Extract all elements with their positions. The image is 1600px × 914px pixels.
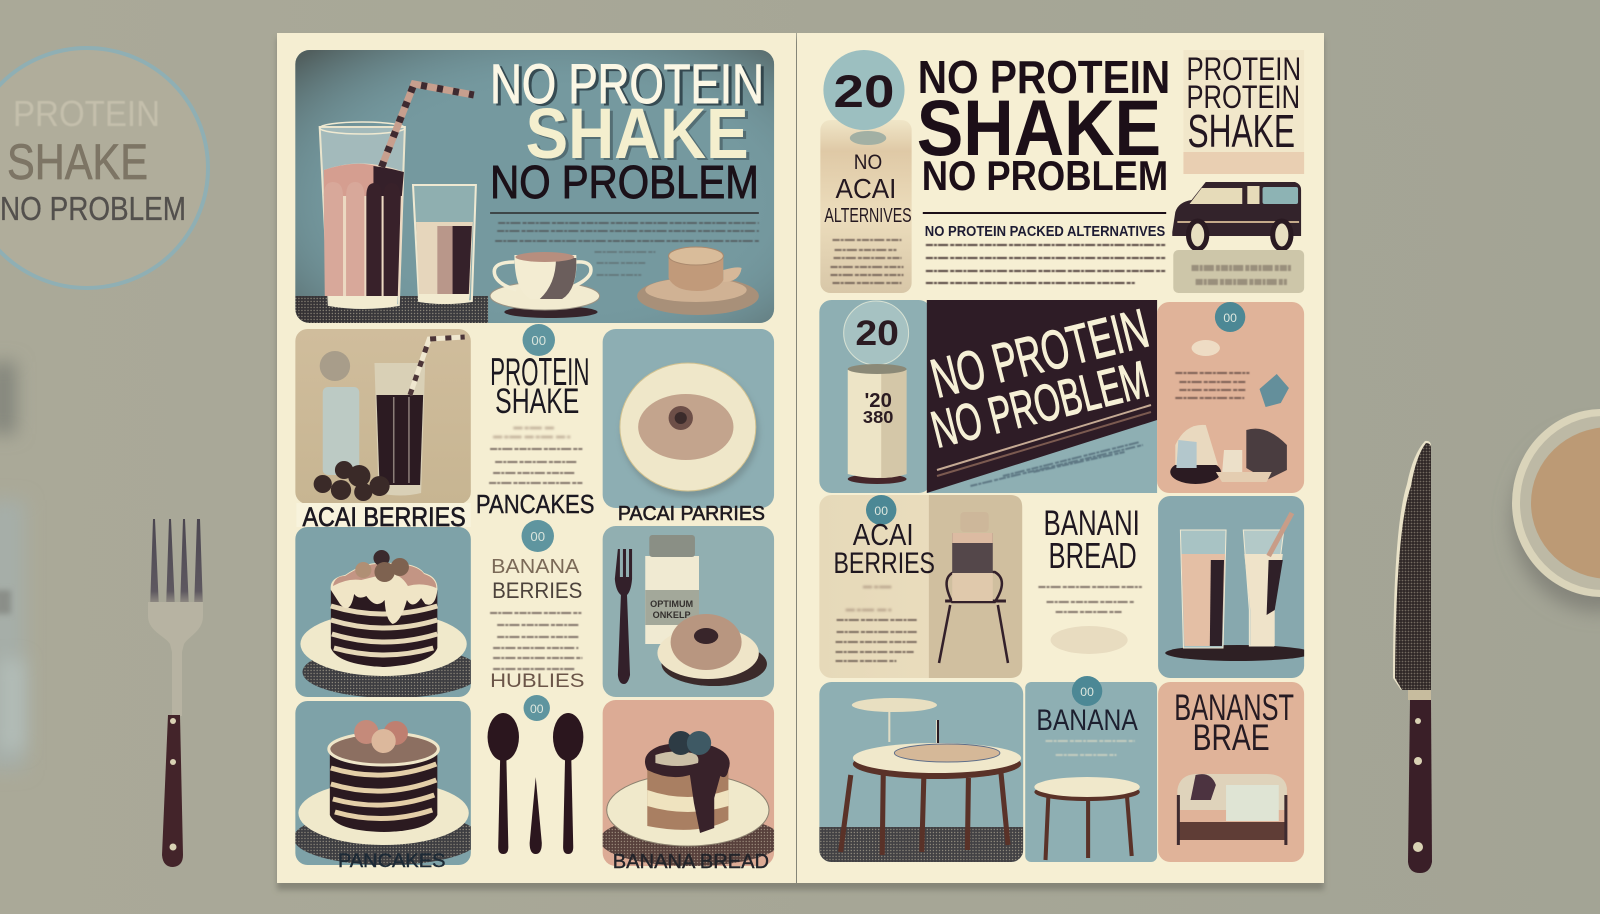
page: right	[797, 33, 1324, 883]
hero heading: NO PROTEIN	[490, 52, 764, 115]
hero text block	[490, 213, 759, 275]
banana heading: BANANA	[1036, 704, 1138, 737]
panel: protein shake column: SHAKE	[495, 382, 579, 421]
fuzzy text	[1046, 741, 1135, 755]
panel: banana table	[1025, 676, 1157, 862]
sidebar heading	[824, 151, 912, 227]
berries	[355, 550, 409, 582]
table shadow	[295, 296, 488, 323]
table	[841, 743, 1021, 855]
badge	[866, 495, 896, 525]
stack	[331, 563, 437, 667]
tall glass of shake	[320, 84, 474, 308]
page shadows	[277, 38, 1324, 890]
badge	[1215, 302, 1245, 332]
glass disc	[844, 301, 909, 365]
short glass of shake	[413, 185, 476, 304]
coaster text: protein: PROTEIN	[13, 93, 160, 134]
footer notes right	[822, 870, 1309, 872]
tan coffee cup	[637, 247, 759, 315]
badge: 00	[530, 529, 545, 544]
sidebar: no acai alternatives	[820, 50, 912, 293]
badge: 00	[531, 333, 546, 348]
panel: two glasses on teal	[1158, 496, 1311, 678]
garbled heading: BANANA	[491, 556, 580, 578]
panel: jar, fork and doughnut	[603, 526, 774, 697]
panel: banani bread column: BANANI	[1043, 504, 1140, 543]
badge: 20	[823, 50, 905, 130]
jar: ONKELP	[653, 610, 691, 620]
sidebar heading: ALTERNIVES	[824, 205, 912, 227]
small tray	[852, 698, 938, 744]
knife	[530, 777, 542, 854]
fuzzy text	[490, 613, 582, 669]
hero heading: SHAKE	[529, 96, 752, 176]
doughnut on plate	[657, 614, 767, 686]
label: pancakes: PANCAKES	[338, 851, 445, 872]
hero heading	[490, 52, 767, 208]
badge	[524, 695, 550, 721]
panel: round table	[819, 682, 1023, 862]
garbled label: HUBLIES	[490, 671, 584, 692]
side heading: protein protein shake: PROTEIN	[1186, 79, 1300, 115]
right glass	[1243, 513, 1292, 646]
sidebar text	[830, 240, 904, 283]
alternatives text block: NO PROTEIN PACKED ALTERNATIVES	[925, 223, 1165, 240]
pill	[850, 131, 886, 145]
badge: 00	[530, 702, 544, 716]
hero heading: SHAKE	[526, 94, 749, 174]
panel: cutlery silhouettes	[488, 695, 583, 854]
label: pacai parries: PACAI PARRIES	[618, 503, 765, 525]
badge: 00	[1080, 685, 1094, 699]
coaster text: no problem: NO PROBLEM	[0, 190, 186, 227]
heading: BRAE	[1193, 716, 1270, 758]
panel: protein shake column	[476, 324, 595, 519]
can: '20	[864, 390, 892, 412]
fork	[615, 549, 632, 684]
protein shake heading: PROTEIN	[490, 350, 589, 394]
sidebar heading: ACAI	[836, 172, 896, 204]
stack	[329, 733, 438, 832]
panel: hero	[295, 50, 774, 323]
label: acai berries: ACAI BERRIES	[302, 501, 466, 532]
garbled heading: BERRIES	[492, 578, 582, 603]
cup and saucer	[490, 252, 600, 318]
coaster text: shake: SHAKE	[7, 134, 148, 190]
garbled heading	[491, 556, 582, 603]
footer note left	[290, 871, 329, 873]
left edge blotches	[0, 362, 25, 770]
berries	[669, 731, 711, 755]
sketch	[1051, 626, 1128, 654]
can	[848, 364, 907, 484]
acai berries heading	[834, 517, 935, 580]
left glass	[1180, 530, 1226, 648]
sidebar heading: NO	[854, 151, 882, 174]
side heading: protein protein shake	[1183, 50, 1304, 174]
icon: knife	[1393, 441, 1432, 873]
fuzzy text	[1038, 587, 1142, 612]
banner fine print	[970, 442, 1143, 486]
left page contents	[290, 50, 782, 873]
berries	[354, 720, 408, 753]
bottle	[323, 387, 359, 475]
jar	[645, 535, 699, 644]
glass disc: 20	[855, 314, 899, 353]
panel: banani bread column	[1038, 504, 1142, 654]
side heading: protein protein shake: SHAKE	[1187, 105, 1295, 157]
banner heading: NO PROBLEM	[926, 351, 1154, 460]
label: banana bread: BANANA BREAD	[613, 851, 769, 873]
hero heading: NO PROBLEM	[490, 156, 759, 208]
chair with stacked boxes	[939, 512, 1008, 663]
acai berries heading: ACAI	[853, 517, 914, 552]
panel: canister on teal	[819, 300, 931, 493]
tall dark glass	[374, 337, 465, 496]
badge: 00	[1223, 311, 1237, 325]
panel: layered pancakes	[295, 527, 481, 698]
banner heading	[925, 297, 1154, 460]
text lines	[1175, 373, 1249, 398]
panel: pink still life	[1157, 302, 1304, 493]
right page contents	[819, 50, 1311, 871]
main heading	[917, 51, 1170, 199]
badge	[1072, 676, 1102, 706]
badge	[523, 324, 555, 356]
main heading: NO PROTEIN	[918, 51, 1170, 103]
icon: vintage van	[1172, 182, 1301, 249]
plate	[300, 612, 467, 676]
heading	[1174, 686, 1294, 758]
berries	[314, 461, 390, 501]
spoon left	[488, 713, 519, 854]
main heading: NO PROBLEM	[922, 152, 1168, 199]
badge: 20: 20	[834, 66, 894, 117]
blobs	[1192, 340, 1220, 356]
alternatives text block	[923, 213, 1166, 283]
acai berries heading: BERRIES	[834, 547, 935, 580]
icon: bowl of powder	[1512, 409, 1600, 612]
panel: banani bread column: BREAD	[1049, 535, 1137, 576]
panel: chocolate cake	[600, 700, 782, 873]
table	[1034, 777, 1140, 860]
panel: acai berries photo	[295, 329, 471, 504]
machine illustration	[1177, 774, 1287, 845]
banner heading: NO PROTEIN	[925, 297, 1154, 410]
main heading: SHAKE	[917, 84, 1161, 172]
icon: fork	[148, 519, 203, 867]
panel: plate on teal	[603, 329, 774, 508]
heading: BANANST	[1174, 686, 1294, 728]
hero heading: NO PROTEIN	[493, 54, 767, 117]
cake	[645, 743, 730, 833]
panel: berries column	[490, 520, 584, 692]
kite	[1260, 374, 1289, 407]
badge: 00	[874, 504, 888, 518]
page: left	[277, 33, 796, 883]
van caption block	[1173, 250, 1304, 293]
jar: OPTIMUM	[650, 599, 693, 609]
fuzzy text	[846, 587, 891, 610]
can: 380	[863, 407, 893, 427]
coin icon	[320, 351, 350, 381]
panel: pancakes photo	[293, 701, 480, 872]
glass coaster with faded title	[0, 48, 208, 288]
spoon right	[553, 713, 583, 854]
panel: banast brae	[1158, 682, 1304, 862]
side heading: protein protein shake: PROTEIN	[1186, 51, 1301, 87]
panel: acai berries with chair	[819, 495, 1022, 678]
bowls	[1170, 425, 1287, 484]
fuzzy text	[489, 428, 582, 483]
panel: no protein no problem banner	[925, 297, 1157, 493]
label: pancakes: PANCAKES	[476, 489, 595, 519]
badge	[522, 520, 554, 552]
